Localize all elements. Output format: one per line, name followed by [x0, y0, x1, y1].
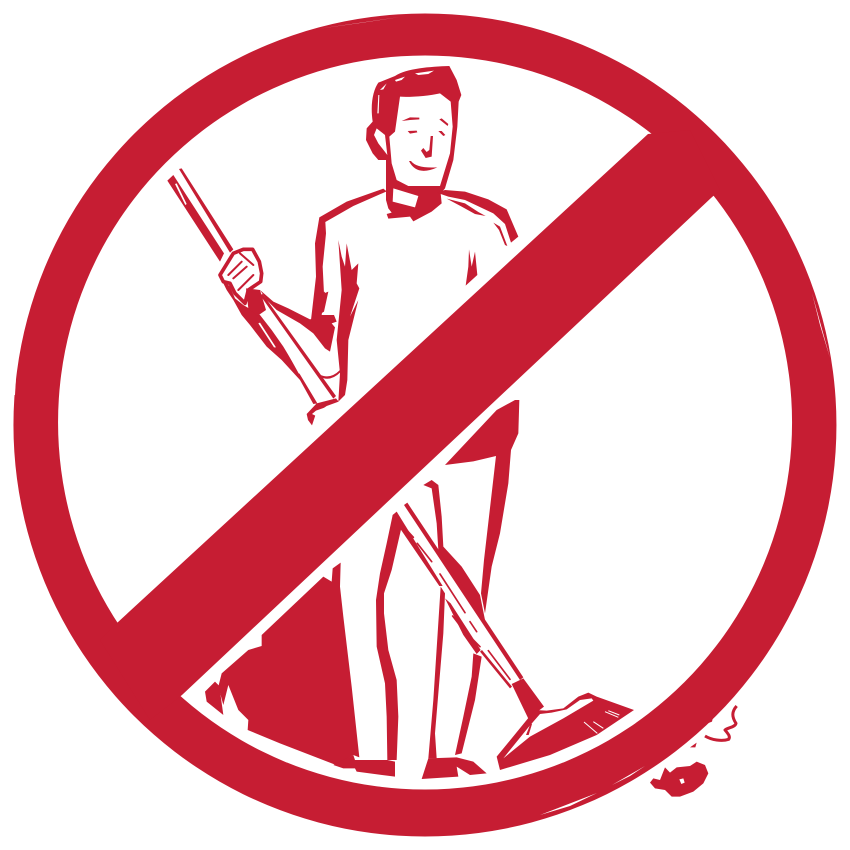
big shadow: [218, 563, 359, 765]
nose: [421, 136, 433, 158]
hair highlights: [377, 71, 434, 113]
shirt hem shadow: [445, 400, 519, 613]
dust clump large: [650, 762, 708, 797]
figure: man holding broom: [167, 66, 737, 797]
forearm outline and handle: [220, 277, 317, 404]
broom shaft and right leg edge: [393, 480, 544, 719]
ear: [374, 128, 387, 155]
handle end cap: [307, 398, 339, 425]
sleeve cuff: [319, 370, 341, 379]
head of man: [366, 66, 461, 221]
broom head: [497, 693, 634, 770]
prohibition diagonal bar: [100, 130, 720, 720]
hand: [220, 249, 262, 303]
face: [389, 93, 453, 186]
dust clumps: [650, 706, 737, 797]
shaft white body: [395, 504, 522, 687]
dust clump small: [705, 706, 737, 740]
left shoulder and broom handle top: [167, 168, 387, 320]
torso of man: [437, 190, 518, 286]
lower body of man: [205, 400, 519, 779]
right shirt fold: [466, 249, 477, 286]
feet: [333, 755, 395, 777]
shaft edges: [404, 503, 523, 680]
eyes: [408, 131, 445, 136]
sleeve shadow and shirt side: [260, 290, 337, 352]
shaft dashes: [407, 530, 510, 679]
head and hair silhouette: [366, 66, 461, 221]
right leg lines: [428, 587, 445, 758]
right shoulder: [437, 190, 518, 243]
handle streaks: [258, 323, 301, 374]
left shoulder: [311, 189, 387, 320]
arm, hand and lower handle: [220, 240, 359, 425]
broom neck: [512, 678, 544, 719]
collar: [393, 188, 418, 207]
broom handle upper: [167, 175, 224, 262]
left leg inner edge: [376, 512, 402, 760]
eyebrows: [402, 117, 448, 126]
mouth: [409, 161, 437, 171]
right leg inner edge: [423, 480, 485, 622]
